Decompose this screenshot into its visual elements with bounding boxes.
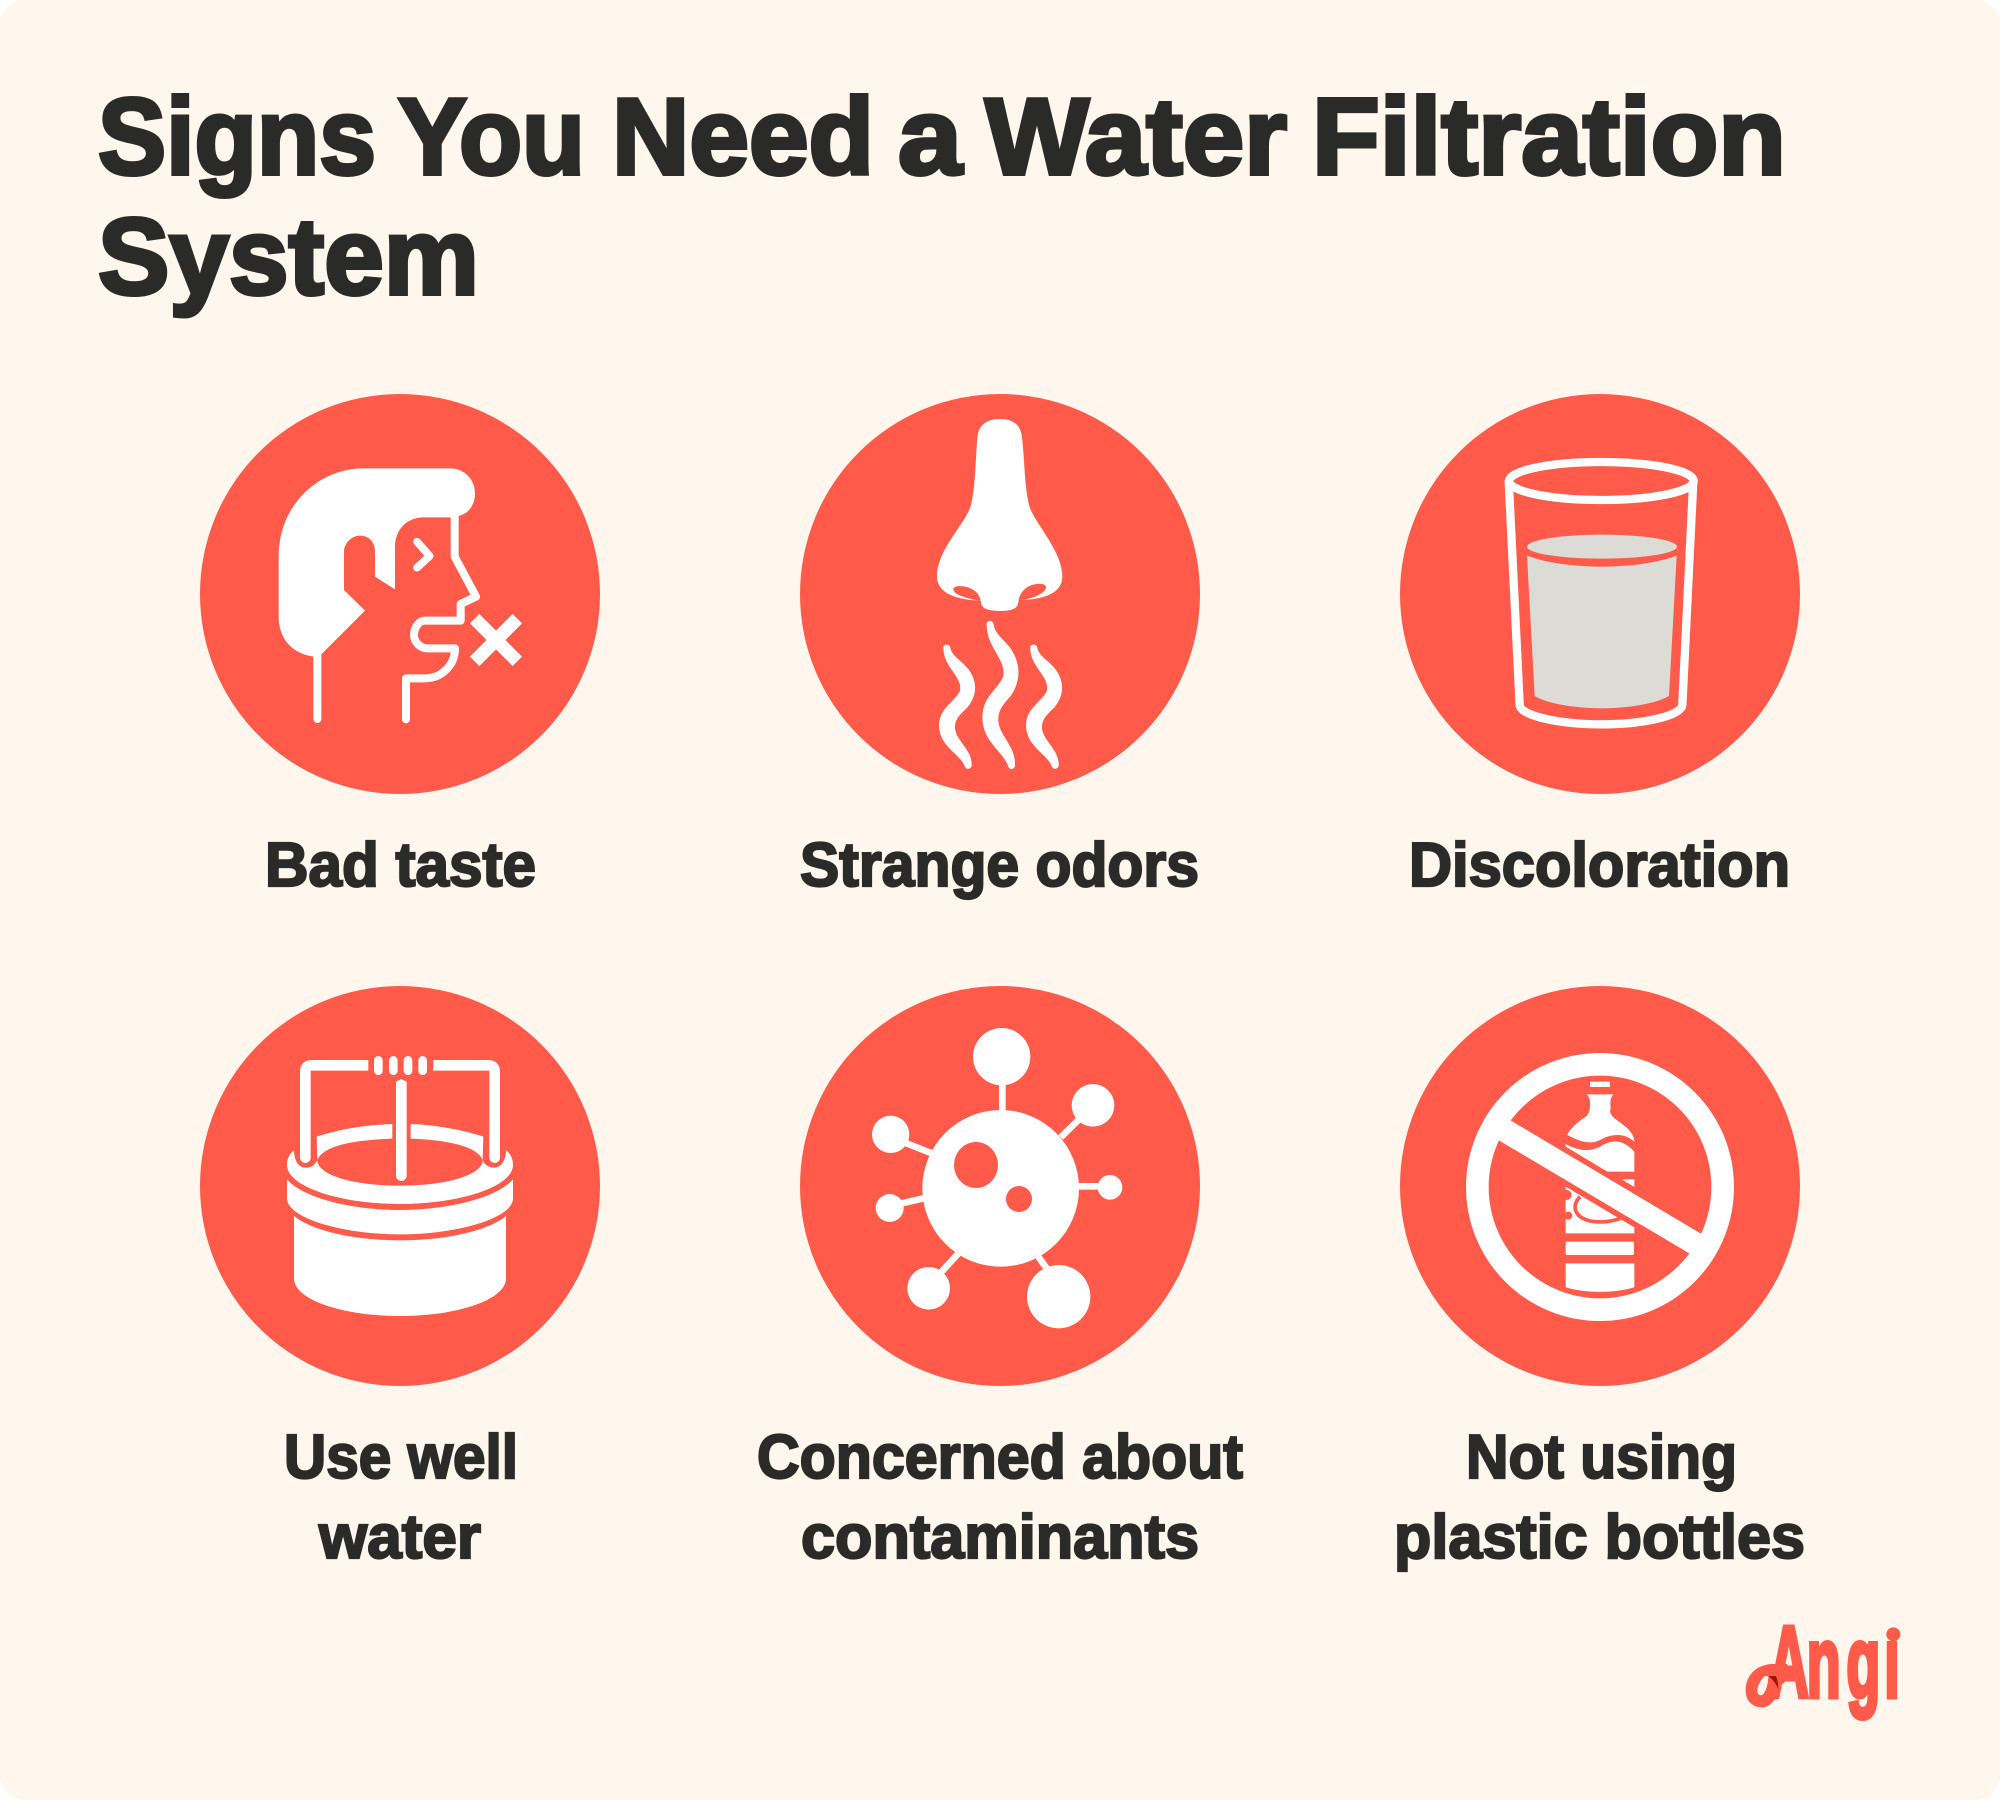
title: Filtration bbox=[1312, 76, 1786, 198]
label: not using plastic bottles: plastic bottles bbox=[1394, 1503, 1805, 1572]
icon: well bbox=[200, 986, 600, 1386]
panel: not using plastic bottles bbox=[1394, 986, 1805, 1572]
title: System bbox=[98, 196, 479, 318]
title: Signs bbox=[98, 76, 376, 198]
icon: person with bad taste bbox=[200, 394, 600, 794]
label: concerned about contaminants: Concerned about bbox=[757, 1423, 1243, 1492]
label: strange odors: Strange odors bbox=[800, 831, 1199, 900]
panel: concerned about contaminants bbox=[757, 986, 1243, 1572]
title: Need bbox=[612, 76, 874, 198]
label: bad taste: Bad taste bbox=[265, 831, 536, 900]
label: not using plastic bottles: Not using bbox=[1466, 1423, 1737, 1492]
label: concerned about contaminants: contaminants bbox=[801, 1503, 1199, 1572]
label: use well water: water bbox=[318, 1503, 481, 1572]
icon: microbe bbox=[800, 986, 1200, 1386]
label: not using plastic bottles bbox=[1394, 1423, 1805, 1572]
panel: discoloration bbox=[1400, 394, 1800, 900]
label: use well water: Use well bbox=[284, 1423, 518, 1492]
panel: bad taste bbox=[200, 394, 600, 900]
title: a bbox=[898, 76, 963, 198]
logo: Angi: Angi bbox=[1769, 1607, 1900, 1719]
label: use well water bbox=[284, 1423, 518, 1572]
title: Water bbox=[985, 76, 1287, 198]
label: discoloration: Discoloration bbox=[1409, 831, 1790, 900]
icon: nose and smell bbox=[800, 394, 1200, 794]
title bbox=[98, 76, 1786, 318]
label: concerned about contaminants bbox=[757, 1423, 1243, 1572]
icon: no plastic bottle bbox=[1400, 986, 1800, 1386]
panel: use well water bbox=[200, 986, 600, 1572]
icon: glass of discolored water bbox=[1400, 394, 1800, 794]
title: You bbox=[398, 76, 585, 198]
panel: strange odors bbox=[800, 394, 1200, 900]
